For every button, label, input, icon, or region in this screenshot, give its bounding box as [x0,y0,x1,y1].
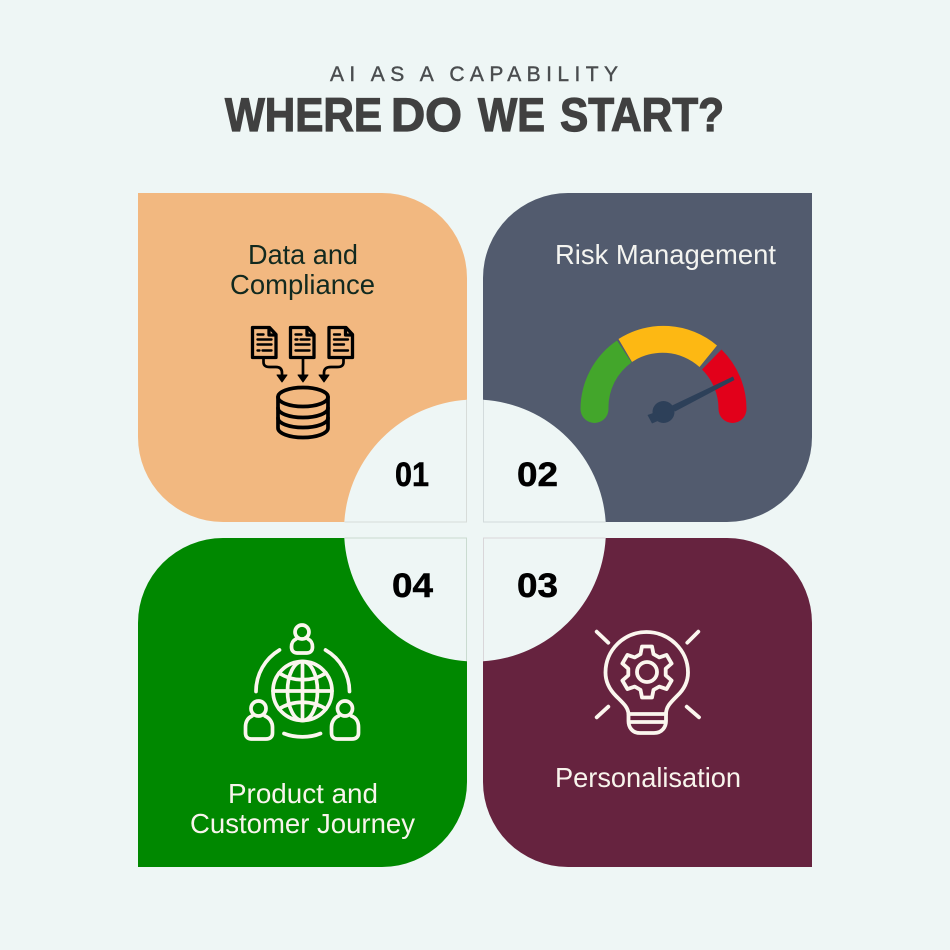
heading: risk management: Risk Management [555,239,776,270]
number 02: 02 [517,456,558,494]
number 03: 03 [517,567,558,605]
panel: risk management [483,193,812,522]
heading: product and customer journey: Customer Journey [190,808,415,839]
number 04: 04 [392,567,433,605]
number 01: 01 [395,456,429,494]
icon: documents into database [252,328,352,438]
heading: data and compliance: Compliance [230,269,375,300]
panel: data and compliance [138,193,467,522]
icon: gauge [580,326,747,424]
heading: data and compliance: Data and [248,239,358,270]
icon: global network of people [246,625,358,739]
title: START? [560,88,724,141]
icon: lightbulb with gear [597,632,699,733]
title: DO [391,88,462,141]
subtitle: AI AS A CAPABILITY [330,63,618,86]
heading: product and customer journey: Product and [228,778,378,809]
title: WHERE [225,88,382,141]
title: WE [478,88,545,141]
heading: personalisation: Personalisation [555,762,741,793]
panel: product and customer journey [138,538,467,867]
panel: personalisation [483,538,812,867]
